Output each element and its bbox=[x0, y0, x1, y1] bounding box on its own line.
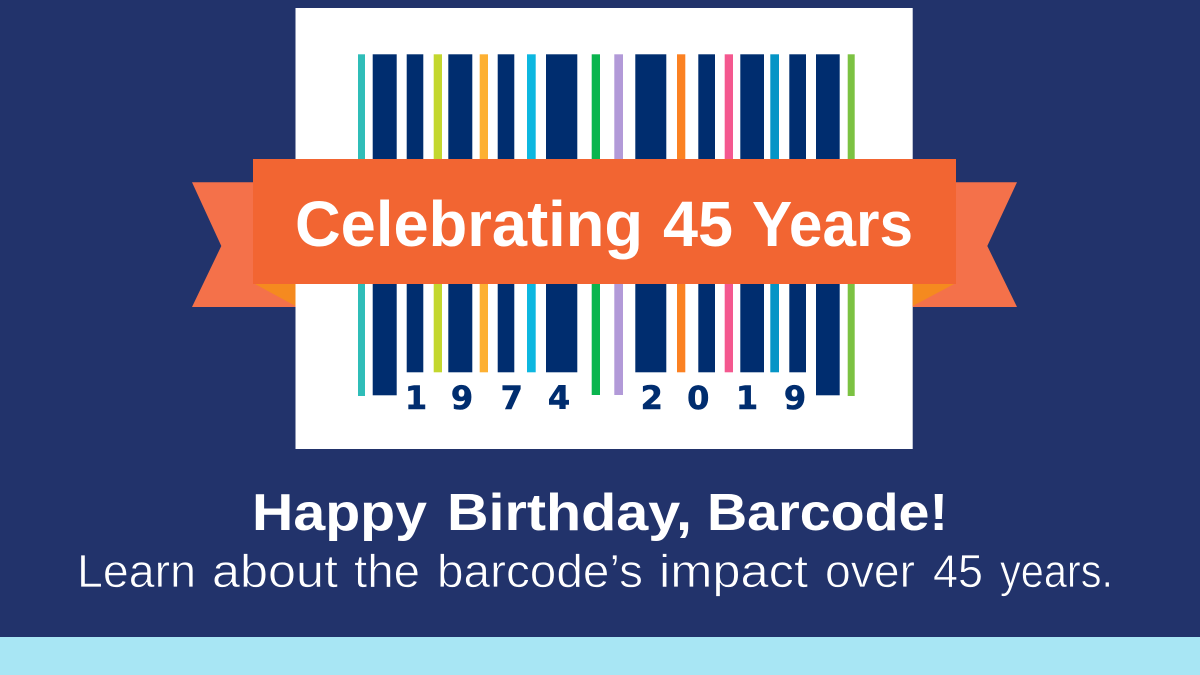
barcode digits: 1974: 9 bbox=[451, 379, 473, 417]
barcode digits: 2019: 2 bbox=[641, 379, 663, 417]
subheading: 45 bbox=[933, 545, 983, 597]
subheading: about bbox=[212, 545, 338, 597]
subheading: years. bbox=[1000, 545, 1113, 597]
white barcode card bbox=[296, 8, 913, 449]
subheading: Learn bbox=[77, 545, 196, 597]
barcode digits: 1974: 7 bbox=[501, 379, 523, 417]
ribbon main banner bbox=[253, 159, 956, 284]
heading: Birthday, bbox=[447, 484, 692, 542]
heading: Barcode! bbox=[707, 484, 948, 542]
subheading: impact bbox=[659, 545, 808, 597]
barcode digits: 2019 bbox=[641, 379, 806, 417]
barcode digits: 1974: 1 bbox=[405, 379, 427, 417]
barcode digits: 2019: 0 bbox=[687, 379, 709, 417]
multicolour barcode bbox=[358, 54, 855, 396]
subheading: over bbox=[825, 545, 915, 597]
banner title bbox=[295, 188, 913, 260]
subheading bbox=[77, 545, 1113, 597]
barcode digits: 2019: 1 bbox=[736, 379, 758, 417]
barcode digits: 2019: 9 bbox=[784, 379, 806, 417]
banner title: Celebrating bbox=[295, 188, 643, 260]
banner title: 45 bbox=[663, 188, 733, 260]
ribbon right tail bbox=[913, 182, 1017, 307]
barcode digits: 1974 bbox=[405, 379, 570, 417]
subheading: barcode’s bbox=[437, 545, 643, 597]
light blue footer band bbox=[0, 637, 1200, 675]
ribbon left fold bbox=[253, 283, 296, 306]
heading: Happy bbox=[252, 484, 427, 542]
banner title: Years bbox=[752, 188, 913, 260]
ribbon left tail bbox=[192, 182, 296, 307]
ribbon right fold bbox=[913, 283, 956, 306]
barcode digits: 1974: 4 bbox=[548, 379, 570, 417]
heading bbox=[252, 484, 948, 542]
subheading: the bbox=[354, 545, 420, 597]
